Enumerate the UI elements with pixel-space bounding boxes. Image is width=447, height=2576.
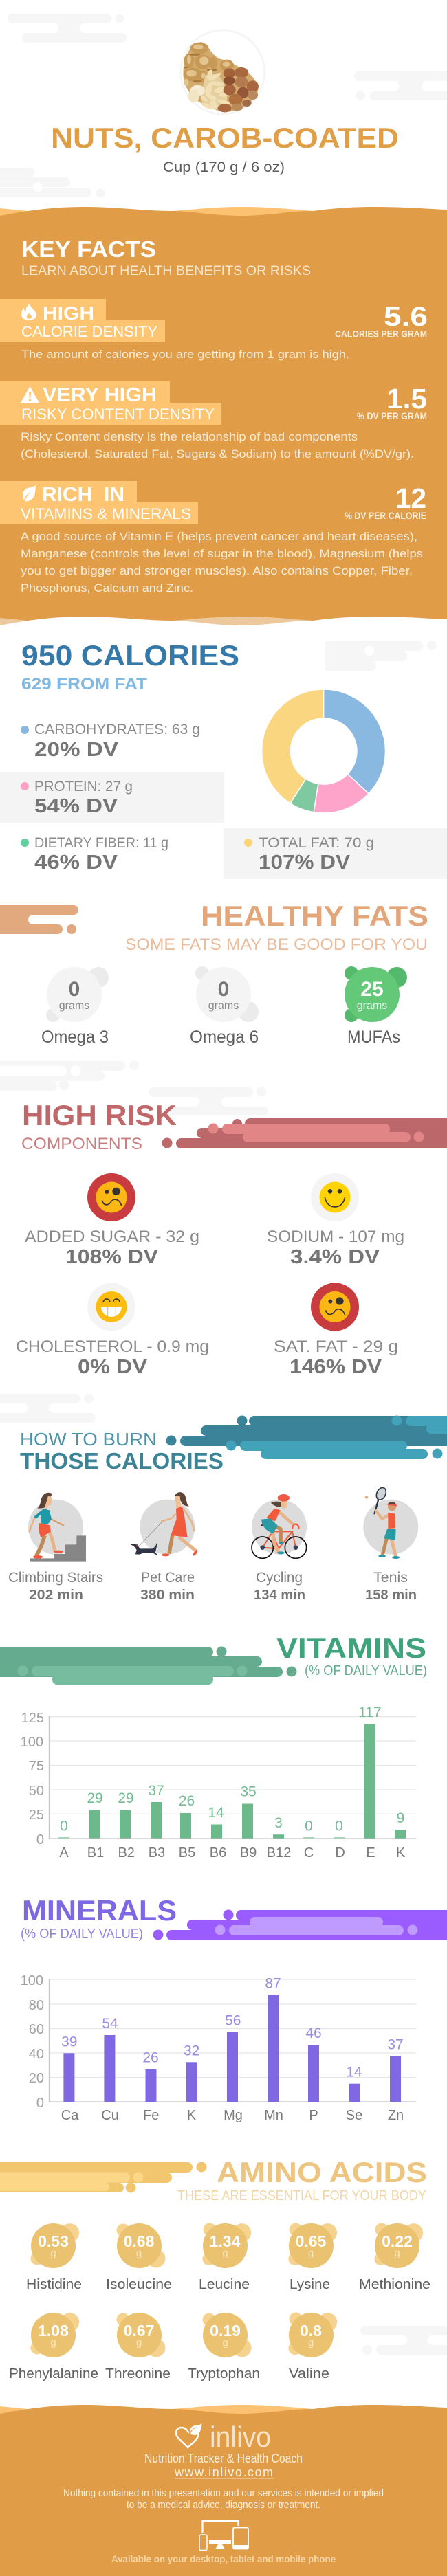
fact: calorie density: HIGH — [43, 302, 94, 324]
heading: high risk — [21, 1099, 177, 1153]
legend: dietary fiber: DIETARY FIBER: 11 g — [34, 835, 168, 851]
availability note: Available on your desktop, tablet and mobile phone — [111, 2554, 336, 2564]
stat: mufas: MUFAs — [347, 1028, 400, 1047]
heading: calories: 950 CALORIES — [21, 639, 239, 671]
activity: cycling: Cycling — [256, 1570, 303, 1586]
tagline: www.inlivo.com — [174, 2465, 273, 2479]
bar chart: vitamins: 75 — [29, 1759, 44, 1774]
panel: how to burn those calories — [8, 1416, 447, 1603]
logo: inlivo: inlivo — [210, 2421, 271, 2453]
amino acid: threonine: Threonine — [105, 2366, 171, 2381]
legend: carbohydrates: CARBOHYDRATES: 63 g — [34, 722, 200, 737]
bar chart: vitamins: 3 — [274, 1815, 283, 1831]
activity: climbing stairs: 202 min — [29, 1588, 83, 1603]
amino acid: valine — [289, 2312, 337, 2381]
amino acid: threonine — [105, 2313, 171, 2381]
amino acid: isoleucine: Isoleucine — [106, 2277, 172, 2292]
icon: smiling face — [311, 1173, 359, 1221]
bar chart: minerals: 80 — [29, 1998, 44, 2013]
fact: risky content density: % DV PER GRAM — [357, 411, 427, 421]
fact: rich in vitamins and minerals: 12 — [395, 482, 426, 514]
heading: how to burn: HOW TO BURN — [20, 1429, 157, 1450]
panel: minerals — [21, 1894, 447, 2123]
bar chart: vitamins: 0 — [305, 1819, 313, 1834]
amino acid: threonine: g — [136, 2337, 142, 2349]
heading: vitamins: (% OF DAILY VALUE) — [305, 1663, 427, 1678]
bar chart: minerals: 54 — [102, 2016, 118, 2032]
panel: key facts — [0, 207, 447, 636]
amino acid: tryptophan: Tryptophan — [188, 2366, 260, 2381]
bar chart: minerals: K — [187, 2108, 197, 2123]
activity: pet care: 380 min — [140, 1588, 195, 1603]
amino acid: histidine: Histidine — [26, 2277, 82, 2292]
serving size: Cup (170 g / 6 oz) — [163, 159, 285, 175]
decorative header bars — [162, 1118, 447, 1148]
disclaimer: Nothing contained in this presentation and our services is intended or implied — [63, 2487, 384, 2499]
bar chart: vitamins: 117 — [358, 1705, 382, 1720]
legend: total fat — [224, 828, 447, 879]
icon: woman on a bicycle — [252, 1494, 307, 1558]
bar chart: vitamins: B9 — [240, 1845, 257, 1861]
activity: tennis: Tenis — [373, 1570, 408, 1586]
stat: omega 3: Omega 3 — [41, 1028, 109, 1047]
panel: amino acids — [0, 2156, 430, 2381]
bar chart: vitamins: 0 — [335, 1819, 343, 1834]
risk item: added sugar — [25, 1173, 199, 1268]
bar chart: minerals: P — [309, 2108, 318, 2123]
amino acid: leucine: g — [222, 2247, 228, 2259]
icon: sad face — [311, 1283, 359, 1331]
risk item: saturated fat: SAT. FAT - 29 g — [274, 1337, 398, 1356]
bar chart: minerals: 0 — [36, 2096, 44, 2111]
bar chart: vitamins: 9 — [397, 1810, 404, 1826]
panel: healthy fats — [0, 900, 428, 1047]
bar chart: minerals: 60 — [29, 2022, 44, 2037]
decorative header bars — [153, 1909, 447, 1940]
decorative header bars — [0, 1647, 297, 1685]
icon: desktop, tablet and phone — [199, 2521, 248, 2550]
panel: vitamins — [0, 1632, 427, 1861]
heading: amino acids: THESE ARE ESSENTIAL FOR YOUR BODY — [177, 2188, 426, 2203]
icon: grinning face — [87, 1283, 135, 1331]
bar chart: minerals: Cu — [101, 2108, 119, 2123]
icon: sad face — [87, 1173, 135, 1221]
heading: how to burn — [20, 1429, 224, 1474]
heading: key facts: KEY FACTS — [21, 236, 156, 262]
bar chart: vitamins: 50 — [29, 1784, 44, 1799]
bar chart: vitamins: B12 — [267, 1845, 291, 1861]
legend: total fat: TOTAL FAT: 70 g — [259, 835, 374, 851]
bar chart: vitamins: D — [335, 1845, 345, 1861]
stat: omega 6 — [190, 966, 259, 1047]
bar chart: minerals: 37 — [387, 2037, 404, 2053]
panel: high risk components — [16, 1099, 447, 1378]
amino acid: lysine: Lysine — [290, 2277, 330, 2292]
fact: calorie density: 5.6 — [384, 302, 428, 332]
heading: how to burn: THOSE CALORIES — [20, 1448, 224, 1474]
panel: calories — [0, 639, 447, 879]
bar chart: minerals: 87 — [265, 1975, 281, 1991]
fact: calorie density: The amount of calories you are getting from 1 gram is high. — [21, 348, 349, 361]
risk item: sodium: 3.4% DV — [290, 1246, 380, 1268]
risk item: added sugar: ADDED SUGAR - 32 g — [25, 1228, 199, 1246]
heading: minerals: (% OF DAILY VALUE) — [21, 1927, 143, 1942]
amino acid: methionine — [359, 2223, 430, 2292]
decorative header bars — [0, 905, 78, 934]
disclaimer: to be a medical advice, diagnosis or treatment. — [127, 2499, 320, 2511]
amino acid: threonine: 0.67 — [124, 2322, 154, 2340]
amino acid: valine: Valine — [289, 2366, 329, 2381]
amino acid: phenylalanine — [9, 2313, 98, 2381]
bar chart: minerals: 40 — [29, 2047, 44, 2062]
icon: flame — [21, 304, 36, 320]
title: NUTS, CAROB-COATED — [51, 122, 399, 154]
heading: vitamins: VITAMINS — [276, 1632, 426, 1664]
stat: mufas — [345, 966, 407, 1047]
bar chart: vitamins: 25 — [29, 1808, 44, 1823]
heading: high risk: HIGH RISK — [22, 1099, 177, 1131]
bar chart: vitamins: 29 — [118, 1790, 134, 1806]
fact: calorie density — [0, 299, 428, 361]
bar chart: minerals: Ca — [61, 2108, 79, 2123]
fact: risky content density — [0, 381, 427, 460]
bar chart: minerals: 39 — [61, 2034, 77, 2050]
bar chart: minerals: 32 — [184, 2043, 199, 2059]
heading: calories — [21, 639, 239, 693]
amino acid: methionine: g — [394, 2247, 400, 2259]
heading: amino acids — [177, 2156, 427, 2203]
heading: healthy fats — [125, 900, 428, 954]
fact: calorie density: CALORIE DENSITY — [21, 323, 157, 340]
bar chart: vitamins: A — [59, 1845, 69, 1861]
amino acid: histidine — [26, 2223, 82, 2292]
legend: dietary fiber: 46% DV — [34, 852, 118, 874]
risk item: added sugar: 108% DV — [65, 1246, 159, 1268]
icon: woman climbing stairs — [28, 1493, 86, 1562]
heading: key facts — [21, 236, 311, 278]
amino acid: tryptophan: 0.19 — [210, 2322, 241, 2340]
bar chart: vitamins: B3 — [149, 1845, 165, 1861]
fact: rich in vitamins and minerals: A good source of Vitamin E (helps prevent cancer and heart diseases), — [21, 530, 417, 543]
risk item: sodium: SODIUM - 107 mg — [267, 1228, 404, 1246]
fact: risky content density: Risky Content density is the relationship of bad components — [21, 430, 358, 443]
activity: cycling — [252, 1494, 307, 1603]
decorative header bars — [0, 2162, 206, 2192]
bar chart: vitamins: E — [366, 1845, 375, 1861]
amino acid: phenylalanine: Phenylalanine — [9, 2366, 98, 2381]
bar chart: minerals: Fe — [143, 2108, 159, 2123]
amino acid: histidine: 0.53 — [38, 2232, 69, 2250]
decorative header bars — [166, 1416, 447, 1459]
bar chart: minerals: 26 — [142, 2050, 159, 2066]
fact: risky content density: 1.5 — [386, 383, 427, 414]
bar chart: vitamins: B2 — [118, 1845, 135, 1861]
amino acid: isoleucine: g — [136, 2247, 142, 2259]
disclaimer — [63, 2487, 384, 2511]
risk item: cholesterol: CHOLESTEROL - 0.9 mg — [16, 1337, 209, 1356]
heading: healthy fats: HEALTHY FATS — [201, 900, 428, 932]
heading: minerals: MINERALS — [22, 1894, 177, 1927]
donut chart — [262, 689, 385, 813]
heading: vitamins — [276, 1632, 427, 1678]
amino acid: valine: 0.8 — [300, 2322, 322, 2340]
bar chart: vitamins: 125 — [21, 1711, 44, 1726]
bar chart: minerals: 46 — [305, 2025, 322, 2041]
bar chart: minerals: Zn — [388, 2108, 404, 2123]
panel: footer — [0, 2405, 447, 2576]
risk item: saturated fat — [274, 1283, 398, 1378]
stat: omega 3 — [41, 967, 109, 1047]
amino acid: lysine: 0.65 — [296, 2232, 327, 2250]
bar chart: vitamins — [21, 1705, 416, 1861]
tagline — [144, 2452, 303, 2479]
heading: healthy fats: SOME FATS MAY BE GOOD FOR YOU — [125, 935, 428, 954]
fact: rich in vitamins and minerals: Phosphorus, Calcium and Zinc. — [21, 581, 193, 595]
bar chart: vitamins: 100 — [21, 1735, 43, 1750]
stat: mufas: grams — [357, 1000, 387, 1012]
bar chart: minerals: 100 — [21, 1973, 43, 1988]
bar chart: vitamins: 26 — [179, 1793, 195, 1809]
amino acid: lysine: g — [308, 2247, 314, 2259]
legend: dietary fiber — [21, 835, 168, 874]
bar chart: vitamins: 0 — [60, 1819, 68, 1834]
heading: high risk: COMPONENTS — [21, 1135, 142, 1153]
amino acid: methionine: 0.22 — [382, 2232, 413, 2250]
legend: carbohydrates — [21, 722, 200, 761]
amino acid: lysine — [289, 2223, 337, 2292]
amino acid: phenylalanine: g — [50, 2337, 56, 2349]
icon: woman walking a dog — [129, 1492, 198, 1557]
bar chart: minerals — [21, 1973, 416, 2123]
legend: carbohydrates: 20% DV — [34, 739, 119, 761]
heading: minerals — [21, 1894, 177, 1942]
stat: omega 6: Omega 6 — [190, 1028, 259, 1047]
risk item: cholesterol — [16, 1283, 209, 1378]
legend: protein: PROTEIN: 27 g — [34, 779, 133, 795]
activity: climbing stairs — [8, 1493, 103, 1603]
bar chart: vitamins: 29 — [87, 1790, 103, 1806]
fact: risky content density: (Cholesterol, Saturated Fat, Sugars & Sodium) to the amount (%DV/gr). — [21, 447, 414, 460]
bar chart: vitamins: B5 — [179, 1845, 195, 1861]
bar chart: vitamins: K — [396, 1845, 406, 1861]
risk item: saturated fat: 146% DV — [290, 1356, 382, 1378]
bar chart: minerals: 20 — [29, 2071, 44, 2086]
icon: man playing tennis — [363, 1486, 418, 1559]
amino acid: phenylalanine: 1.08 — [38, 2322, 69, 2340]
amino acid: leucine — [199, 2223, 251, 2292]
legend: protein: 54% DV — [34, 795, 118, 817]
legend: protein — [0, 772, 224, 823]
fact: calorie density: CALORIES PER GRAM — [335, 329, 427, 340]
bar chart: minerals: 14 — [346, 2065, 362, 2080]
amino acid: histidine: g — [50, 2247, 56, 2259]
icon: warning triangle — [21, 386, 39, 403]
risk item: cholesterol: 0% DV — [78, 1356, 148, 1378]
risk item: sodium — [267, 1173, 404, 1268]
amino acid: methionine: Methionine — [359, 2277, 430, 2292]
bar chart: vitamins: C — [304, 1845, 314, 1861]
activity: tennis: 158 min — [365, 1588, 417, 1603]
amino acid: leucine: Leucine — [199, 2277, 250, 2292]
fact: risky content density: VERY HIGH — [43, 384, 157, 406]
fact: rich in vitamins and minerals: Manganese (controls the level of sugar in the blood), Magnesium (helps — [21, 547, 423, 560]
bar chart: vitamins: B6 — [210, 1845, 226, 1861]
amino acid: valine: g — [308, 2337, 314, 2349]
fact: rich in vitamins and minerals: you to get bigger and stronger muscles). Also contains Copper, Fiber, — [21, 564, 413, 577]
activity: cycling: 134 min — [254, 1588, 305, 1603]
fact: rich in vitamins and minerals: RICH IN — [42, 484, 124, 506]
stat: mufas: 25 — [360, 978, 384, 1001]
heading: amino acids: AMINO ACIDS — [217, 2156, 427, 2188]
amino acid: leucine: 1.34 — [210, 2232, 241, 2250]
tagline: Nutrition Tracker & Health Coach — [144, 2452, 303, 2465]
heading: calories: 629 FROM FAT — [21, 675, 147, 693]
amino acid: tryptophan: g — [222, 2337, 228, 2349]
logo: inlivo — [176, 2421, 271, 2453]
fact: rich in vitamins and minerals: % DV PER CALORIE — [345, 511, 426, 521]
bar chart: vitamins: 14 — [208, 1805, 224, 1821]
bar chart: minerals: Se — [346, 2108, 362, 2123]
bar chart: minerals: Mg — [224, 2108, 243, 2123]
fact: risky content density: RISKY CONTENT DENSITY — [21, 406, 215, 423]
stat: omega 3: grams — [59, 1000, 89, 1012]
stat: omega 6: 0 — [218, 978, 229, 1001]
stat: omega 6: grams — [208, 1000, 239, 1012]
fact: rich in vitamins and minerals — [0, 481, 426, 595]
bar chart: minerals: 56 — [225, 2013, 241, 2029]
fact: rich in vitamins and minerals: VITAMINS & MINERALS — [21, 505, 191, 522]
activity: tennis — [363, 1486, 418, 1603]
stat: omega 3: 0 — [69, 978, 80, 1001]
bar chart: minerals: Mn — [264, 2108, 283, 2123]
icon: leaf — [23, 485, 36, 501]
bar chart: vitamins: 37 — [148, 1783, 164, 1799]
activity: climbing stairs: Climbing Stairs — [8, 1570, 103, 1586]
amino acid: isoleucine — [106, 2223, 172, 2292]
activity: pet care: Pet Care — [141, 1570, 195, 1586]
amino acid: isoleucine: 0.68 — [124, 2232, 155, 2250]
bar chart: vitamins: B1 — [87, 1845, 104, 1861]
heading: key facts: LEARN ABOUT HEALTH BENEFITS OR RISKS — [21, 263, 311, 278]
legend: total fat: 107% DV — [259, 852, 351, 874]
activity: pet care — [129, 1492, 198, 1603]
bar chart: vitamins: 35 — [240, 1784, 257, 1799]
amino acid: tryptophan — [188, 2313, 260, 2381]
food photo: mixed nuts — [181, 30, 265, 114]
bar chart: vitamins: 0 — [36, 1832, 44, 1847]
